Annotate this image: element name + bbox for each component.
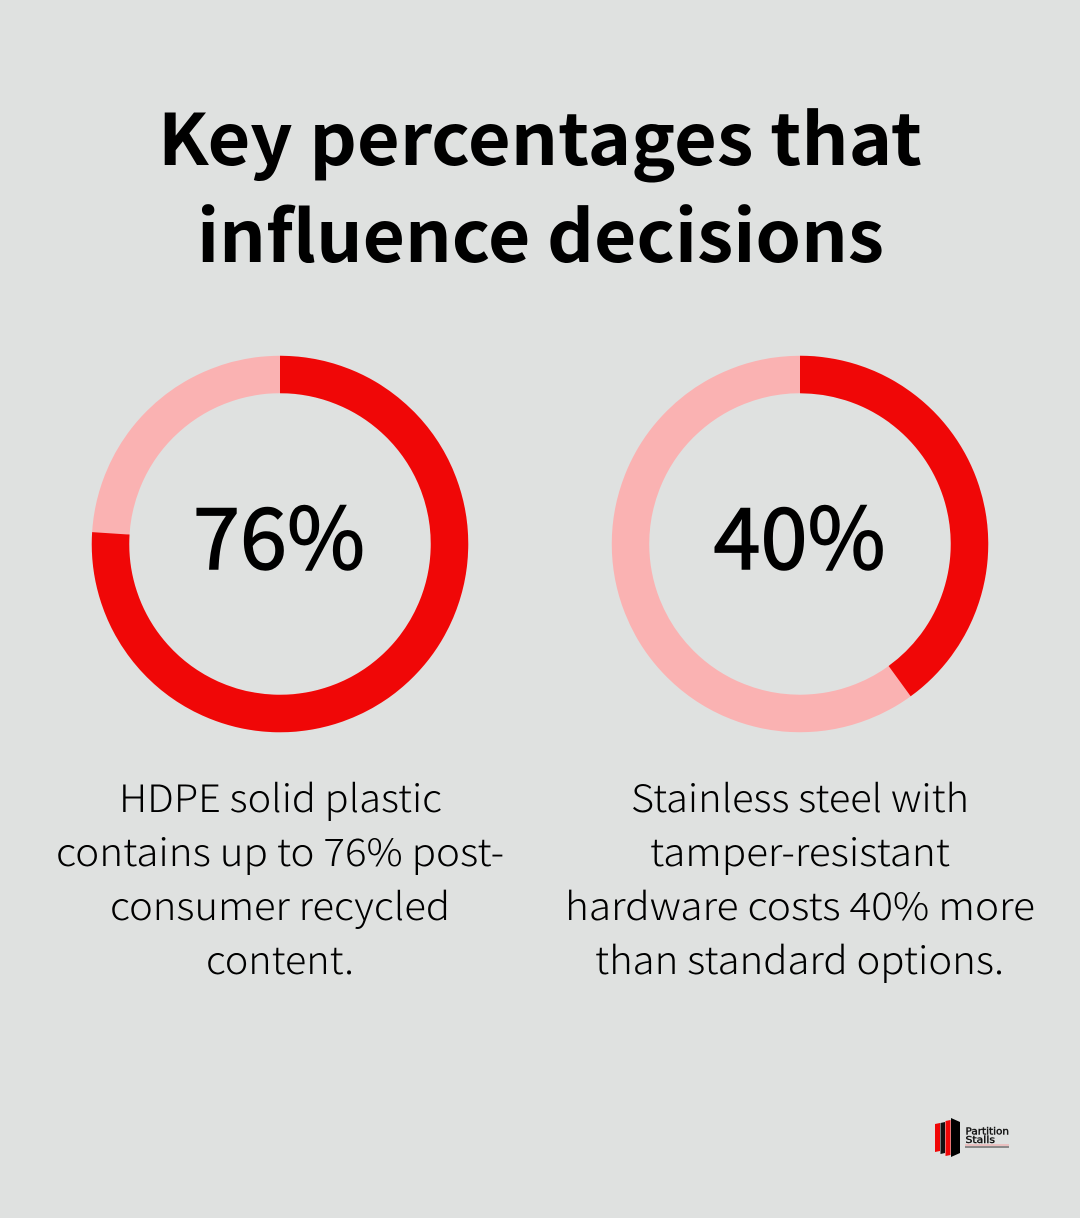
text block: stainless steel description: Stainless steel with bbox=[631, 768, 969, 823]
text block: stainless steel description: hardware costs 40% more bbox=[565, 876, 1035, 931]
text block: HDPE description: content. bbox=[206, 930, 354, 985]
text block: HDPE description: HDPE solid plastic bbox=[119, 768, 442, 823]
value 76%: 76% bbox=[193, 471, 365, 594]
logo wordmark: Partition bbox=[966, 1126, 1009, 1138]
title: Key percentages that bbox=[158, 84, 922, 186]
logo wordmark bbox=[965, 1126, 1009, 1148]
text block: HDPE description: contains up to 76% post- bbox=[56, 822, 504, 877]
text block: stainless steel description bbox=[565, 768, 1035, 985]
panel: 40% donut chart bbox=[630, 374, 970, 714]
logo: Partition Stalls bbox=[935, 1118, 1009, 1157]
donut track bbox=[630, 374, 970, 714]
text block: HDPE description: consumer recycled bbox=[110, 876, 450, 931]
title bbox=[158, 84, 922, 283]
text block: stainless steel description: than standard options. bbox=[595, 930, 1004, 985]
donut track bbox=[110, 374, 450, 714]
donut value arc 76% bbox=[111, 374, 450, 714]
icon: partition panels bbox=[935, 1118, 960, 1157]
title: influence decisions bbox=[197, 181, 884, 283]
text block: stainless steel description: tamper-resistant bbox=[650, 822, 950, 877]
logo wordmark: Stalls bbox=[966, 1135, 995, 1146]
panel: 76% donut chart bbox=[110, 374, 450, 714]
value 40%: 40% bbox=[714, 471, 886, 594]
text block: HDPE description bbox=[56, 768, 504, 985]
donut value arc 40% bbox=[800, 374, 970, 681]
